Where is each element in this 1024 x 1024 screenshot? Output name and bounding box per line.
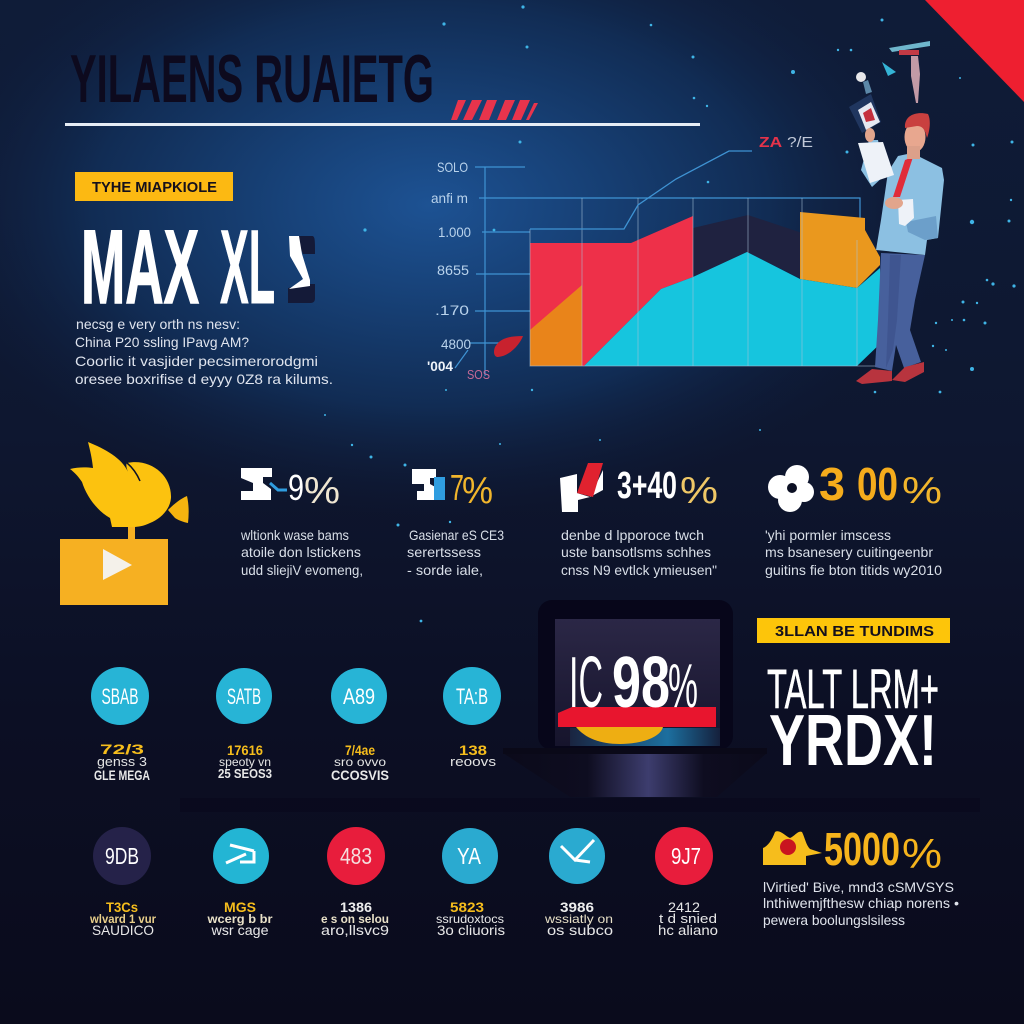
tablet text: IC bbox=[569, 643, 603, 723]
chart axis and labels: anfi m bbox=[431, 190, 468, 206]
circles row 1 bbox=[91, 667, 501, 783]
item 3: 483 bbox=[340, 843, 372, 869]
yellow label: TYHE MIAPKIOLE bbox=[92, 179, 217, 196]
chart orange area left bbox=[530, 285, 582, 366]
stat 4: guitins fie bton titids wy2010 bbox=[765, 562, 942, 578]
held booklet bbox=[849, 94, 881, 133]
title: YILAENS RUAIETG bbox=[70, 41, 434, 117]
stat 3: cnss N9 evtlck ymieusen" bbox=[561, 562, 717, 578]
stat 1: 9 bbox=[288, 467, 304, 508]
yellow dome bbox=[576, 727, 663, 744]
item 6: t d snied bbox=[659, 911, 717, 926]
stat 3: 3+40 bbox=[617, 465, 677, 507]
stat 3: % bbox=[680, 470, 718, 512]
tablet glow bbox=[570, 728, 720, 746]
item 1: SBAB bbox=[102, 684, 138, 709]
item 4: 5823 bbox=[450, 899, 484, 915]
item 5: os subco bbox=[547, 922, 613, 938]
item 6: 9J7 bbox=[671, 843, 701, 869]
head bbox=[904, 122, 926, 152]
item 5 bbox=[544, 828, 613, 938]
tablet body bbox=[538, 600, 733, 750]
stat 2: Gasienar eS CE3 bbox=[409, 527, 504, 543]
item 6 bbox=[655, 827, 718, 938]
intro paragraph bbox=[75, 316, 333, 387]
stat 2: % bbox=[462, 470, 493, 512]
stat 5 value: 5000 bbox=[824, 823, 900, 875]
item 5: wssiatly on bbox=[544, 912, 613, 926]
stat 4: % bbox=[902, 470, 942, 512]
item 2: SATB bbox=[227, 684, 261, 709]
stat 3 bbox=[560, 463, 718, 578]
intro paragraph: China P20 ssling IPavg AM? bbox=[75, 334, 249, 350]
item 6: hc aliano bbox=[658, 922, 718, 938]
item 4: ssrudoxtocs bbox=[436, 912, 504, 926]
tablet text: 98 bbox=[612, 643, 670, 723]
item 2: 25 SEOS3 bbox=[218, 766, 272, 781]
stat 4: 'yhi pormler imscess bbox=[765, 527, 891, 543]
item 3 bbox=[331, 668, 389, 783]
item 1 bbox=[91, 667, 150, 783]
stat 2: serertssess bbox=[407, 544, 481, 560]
chart dark area bbox=[693, 215, 802, 279]
yellow label 2 bbox=[757, 618, 950, 643]
corner triangle bbox=[925, 0, 1024, 102]
item 6: 2412 bbox=[668, 899, 700, 915]
stat 5 bbox=[763, 823, 959, 928]
hair bbox=[905, 113, 930, 138]
held paper bbox=[858, 142, 894, 183]
item 1: 9DB bbox=[105, 843, 139, 869]
item 2: wsr cage bbox=[210, 922, 269, 938]
stat 2 bbox=[407, 467, 504, 578]
stat 5 text bbox=[763, 879, 959, 928]
stat 2: - sorde iale, bbox=[407, 562, 483, 578]
chart axis and labels: .170 bbox=[435, 302, 469, 318]
area chart bbox=[427, 134, 884, 382]
chart red area bbox=[530, 216, 693, 366]
chart axis and labels bbox=[427, 159, 860, 382]
chart axis and labels: '004 bbox=[427, 358, 453, 374]
chart axis and labels: 4800 bbox=[441, 336, 471, 352]
item 2: wcerg b br bbox=[206, 912, 273, 926]
tablet text bbox=[569, 643, 698, 723]
item 1 bbox=[89, 827, 156, 938]
floating objects bbox=[889, 41, 930, 52]
item 3: sro ovvo bbox=[334, 755, 386, 769]
stand bbox=[503, 753, 767, 797]
circles row 2 bbox=[89, 827, 718, 938]
raised arm bbox=[861, 140, 885, 187]
chart axis and labels: SOLO bbox=[437, 159, 468, 175]
intro paragraph: oresee boxrifise d eyyy 0Z8 ra kilums. bbox=[75, 371, 333, 387]
stat 5 text: lnthiwemjfthesw chiap norens • bbox=[763, 895, 959, 911]
yellow label 2: 3LLAN BE TUNDIMS bbox=[775, 623, 934, 640]
item 4 bbox=[436, 828, 505, 938]
chart axis and labels: SOS bbox=[467, 367, 490, 382]
stat 5 value: % bbox=[902, 830, 942, 877]
yellow label bbox=[75, 172, 233, 201]
item 3: A89 bbox=[343, 684, 375, 709]
item 3 bbox=[321, 827, 389, 938]
stat 5 text: pewera boolungslsiless bbox=[763, 912, 905, 928]
stat 3: denbe d lpporoce twch bbox=[561, 527, 704, 543]
chart orange area right bbox=[800, 212, 880, 288]
item 3: CCOSVIS bbox=[331, 767, 389, 783]
title rule bbox=[65, 123, 700, 126]
stat 1: atoile don lstickens bbox=[241, 544, 361, 560]
item 4: YA bbox=[457, 843, 482, 869]
headline 2: YRDX! bbox=[769, 701, 937, 781]
pants bbox=[875, 253, 925, 371]
stat 5 icon bbox=[763, 831, 822, 865]
item 3: 1386 bbox=[340, 899, 372, 915]
item 5: 3986 bbox=[560, 899, 594, 915]
item 2 bbox=[206, 828, 273, 938]
item 1: SAUDICO bbox=[92, 922, 154, 938]
icon: yellow bird and play box bbox=[60, 442, 189, 605]
stat 1: % bbox=[304, 470, 340, 512]
item 4: 138 bbox=[459, 742, 487, 758]
stat 3: uste bansotlsms schhes bbox=[561, 544, 711, 560]
item 1: genss 3 bbox=[97, 754, 147, 769]
item 4: reoovs bbox=[450, 754, 497, 769]
intro paragraph: Coorlic it vasjider pecsimerorodgmi bbox=[75, 353, 318, 369]
decorative star field bbox=[324, 5, 1016, 622]
stat 5 text: lVirtied' Bive, mnd3 cSMVSYS bbox=[763, 879, 954, 895]
illustration: man with papers bbox=[849, 41, 944, 384]
stat 2: 7 bbox=[450, 467, 464, 508]
stat 1: udd sliejiV evomeng, bbox=[241, 562, 363, 578]
tablet on stand bbox=[180, 600, 980, 812]
item 1: 72/3 bbox=[100, 741, 144, 757]
tablet text: % bbox=[668, 652, 698, 721]
tie bbox=[893, 157, 913, 197]
item 2: speoty vn bbox=[219, 755, 271, 769]
item 1: GLE MEGA bbox=[94, 767, 150, 783]
headline 2 bbox=[767, 657, 939, 781]
stat 4: 3 bbox=[819, 458, 845, 510]
shoes bbox=[856, 369, 892, 384]
hands bbox=[865, 128, 875, 142]
big headline: MAX bbox=[81, 209, 199, 326]
chart grid bbox=[530, 198, 880, 366]
chart callout line bbox=[530, 151, 752, 229]
chart cyan area bbox=[584, 252, 884, 366]
tablet screen bbox=[555, 619, 720, 746]
title accent stripes bbox=[451, 100, 538, 120]
stat 4: ms bsanesery cuitingeenbr bbox=[765, 544, 933, 560]
stat 1 bbox=[240, 467, 363, 578]
stat 4: 00 bbox=[857, 458, 898, 510]
item 2: 17616 bbox=[227, 742, 263, 758]
chart axis and labels: 8655 bbox=[437, 262, 469, 278]
big headline: XL bbox=[220, 209, 275, 326]
red bar bbox=[558, 707, 716, 727]
stat 1: wltionk wase bams bbox=[240, 527, 349, 543]
item 4: 3o cliuoris bbox=[437, 922, 505, 938]
item 1: wlvard 1 vur bbox=[89, 912, 156, 926]
shirt bbox=[876, 153, 944, 255]
chart axis and labels: 1.000 bbox=[438, 224, 471, 240]
item 2: MGS bbox=[224, 899, 256, 915]
item 2 bbox=[216, 668, 272, 781]
item 3: aro,llsvc9 bbox=[321, 922, 389, 938]
chart callout label: ZA ?/E bbox=[759, 134, 813, 151]
floor shadow bbox=[180, 798, 980, 812]
item 3: e s on selou bbox=[321, 912, 389, 926]
intro paragraph: necsg e very orth ns nesv: bbox=[76, 316, 240, 332]
item 4: TA:B bbox=[456, 684, 488, 709]
item 1: T3Cs bbox=[106, 899, 138, 915]
item 4 bbox=[443, 667, 501, 769]
stat 4 bbox=[765, 458, 942, 578]
item 3: 7/4ae bbox=[345, 742, 375, 758]
